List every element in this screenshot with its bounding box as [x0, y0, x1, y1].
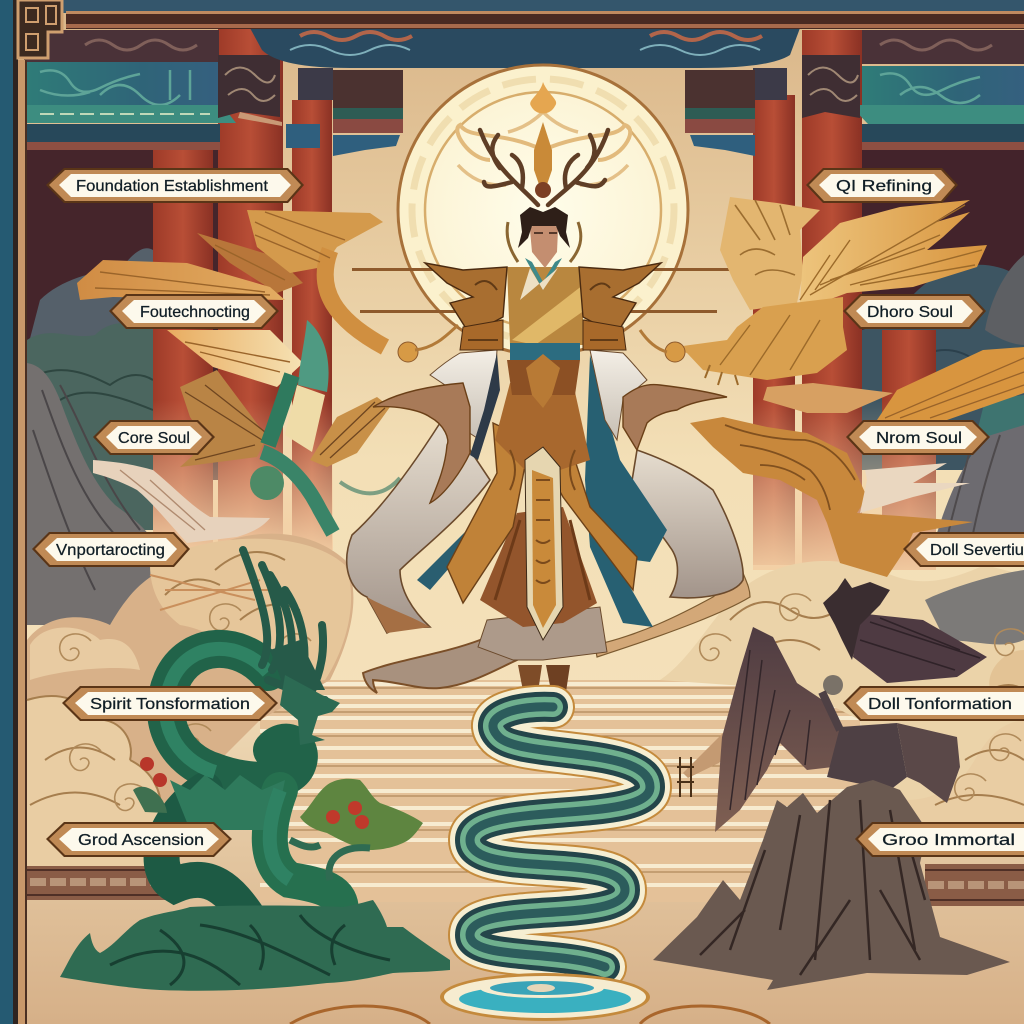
- right gold griffin wing and body: [640, 200, 987, 385]
- label: Spirit Transformation: [62, 686, 278, 721]
- dragon mane and head: [243, 550, 340, 745]
- label: Qi Refining: QI Refining: [836, 178, 932, 195]
- icon: golden orb right: [665, 342, 685, 362]
- label: Foundation Establishment: [46, 168, 304, 203]
- label: Foutechnocting: Foutechnocting: [140, 304, 250, 321]
- pillars: [153, 28, 936, 570]
- floor and stairs: [27, 680, 1024, 1024]
- icon: flame drop: [530, 82, 556, 114]
- shoulder armor: [425, 263, 661, 350]
- halo disc: [398, 65, 688, 355]
- label: Dhoro Soul: [843, 294, 986, 329]
- central figure robe: [447, 258, 637, 696]
- label: Groo Immortal: Groo Immortal: [882, 832, 1015, 849]
- label: Foutechnocting: [109, 294, 279, 329]
- right clouds: [660, 561, 1024, 830]
- left eave teal blue: [24, 30, 236, 150]
- label: Vnportarocting: Vnportarocting: [56, 542, 165, 559]
- label: Vnportarocting: [32, 532, 190, 567]
- head and antler crown: [480, 122, 608, 268]
- label: Doll Severtiu: Doll Severtiu: [930, 542, 1024, 559]
- red flowers and bush: [133, 757, 423, 880]
- label: Foundation Establishment: Foundation Establishment: [76, 178, 269, 195]
- dark eagle left wing: [683, 627, 840, 832]
- river path: [470, 707, 650, 967]
- label: Dhoro Soul: Dhoro Soul: [867, 304, 953, 321]
- label: Nrom Soul: [846, 420, 990, 455]
- right eave teal blue: [850, 30, 1024, 150]
- white bird lower left: [93, 460, 270, 543]
- label: Doll Severtiu: [903, 532, 1024, 567]
- left border: [0, 0, 62, 1024]
- distant hills right: [862, 255, 1024, 560]
- label: Groo Immortal: [855, 822, 1024, 857]
- green dragon: [162, 550, 341, 920]
- rock spire: [653, 780, 1010, 990]
- dark creature upper right: [823, 578, 987, 683]
- label: Doll Transformation: [843, 686, 1024, 721]
- right gold dragon: [690, 347, 1024, 577]
- label: Doll Transformation: Doll Tonformation: [868, 696, 1012, 713]
- green winged dragon: [180, 320, 400, 533]
- upper-left golden bird: [77, 210, 458, 387]
- icon: golden orb left: [398, 342, 418, 362]
- top roof band: [0, 0, 1024, 29]
- left clouds: [27, 534, 353, 866]
- label: Core Soul: [93, 420, 215, 455]
- label: Grod Ascension: Grod Ascension: [78, 832, 204, 849]
- dark left panel: [24, 150, 224, 480]
- distant hills left: [27, 248, 165, 625]
- pillar capitals: [218, 55, 860, 148]
- dark right panel: [860, 150, 1024, 450]
- label: Grod Ascension: [46, 822, 232, 857]
- river pool: [440, 973, 650, 1021]
- central lintels: [250, 28, 800, 156]
- label: Core Soul: Core Soul: [118, 430, 190, 447]
- central figure sleeves and drapes: [347, 350, 750, 693]
- label: Spirit Transformation: Spirit Tonsformation: [90, 696, 250, 713]
- green root mound: [60, 900, 450, 991]
- label: Nrom Soul: Nrom Soul: [876, 430, 962, 447]
- label: Qi Refining: [806, 168, 958, 203]
- dark eagle body: [822, 675, 960, 803]
- horizontal thin rails: [352, 268, 736, 313]
- small gate post: [677, 757, 694, 797]
- upper-right griffin: [720, 197, 820, 310]
